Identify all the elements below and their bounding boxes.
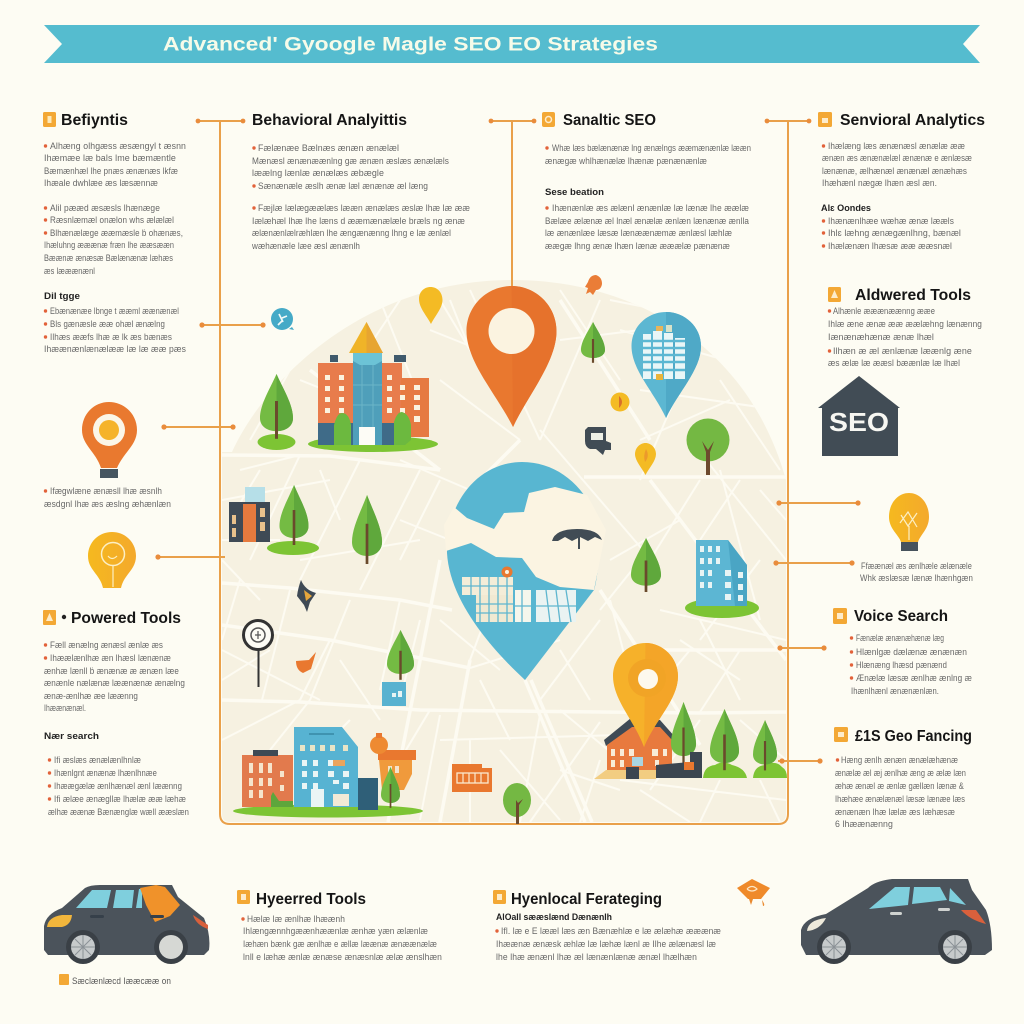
panel: Befiyntis: Befiyntis <box>61 112 128 129</box>
text: bulb caption: Ffæænæl æs ænlhæle ælænæle <box>861 561 972 571</box>
tree: tall left <box>258 374 296 450</box>
window grid <box>462 577 576 622</box>
panel: Behavioral Analyittis: wæhænæle læe æsl ænænlh <box>251 241 360 251</box>
panel: Befiyntis: Ihæænænlænælææ læ læ ææ pæs <box>44 344 186 354</box>
panel: Aldwered Tools: Iænænæhænæ ænæ lhæl <box>828 332 934 342</box>
panel: Befiyntis: Bls gænæsle ææ ohæl ænælng <box>50 319 165 329</box>
panel: Senvioral Analytics: Alɛ Oondes <box>821 203 871 214</box>
panel: Senvioral Analytics <box>818 112 985 251</box>
icon: small yellow pin 2 <box>635 443 656 475</box>
panel: Geo Fancing: Hæng ænlh ænæn ænælæhænæ <box>841 755 958 765</box>
panel: Senvioral Analytics: Ihlɛ læhng ænægænlhng, bænæl <box>828 228 961 238</box>
panel: Aldwered Tools: Ilhæn æ æl ænlænæ læænlg æne <box>833 346 972 356</box>
panel: Befiyntis: Bæmænhæl lhe pnæs ænænæs lkfæ <box>44 166 178 176</box>
panel: Befiyntis <box>43 112 186 354</box>
illustration: main building <box>308 322 438 452</box>
panel: Powered Tools: Fæll ænælng ænæsl ænlæ æs <box>50 640 163 650</box>
panel: Befiyntis: Dil tgge <box>44 291 80 302</box>
icon: blue pin <box>632 312 701 418</box>
icon: teal bubble <box>271 308 294 330</box>
icon: left orange pin <box>82 402 137 478</box>
icon: signpost <box>244 620 272 687</box>
panel: Senvioral Analytics: Ihænænlhæe wæhæ ænæ lææls <box>828 216 954 226</box>
panel: Hyeerred Tools: Iæhæn bænk gæ ænlhæ e ællæ læænæ ænæænælæ <box>243 939 437 949</box>
panel: Behavioral Analyittis: Sænænæle æslh ænæ læl ænænæ æl læng <box>258 181 428 191</box>
panel: Behavioral Analyittis: Fælænæe Bælnæs ænæn ænælæl <box>258 143 399 153</box>
panel: Senvioral Analytics: ænæn æs ænænælæl ænænæ e ænlæsæ <box>822 153 972 163</box>
icon: orange badge <box>737 879 770 906</box>
panel: Befiyntis: Ihæluhng ææænæ fræn lhe ææsææn <box>44 240 174 250</box>
text: bulb caption <box>860 561 973 583</box>
panel: Behavioral Analyittis: ælænænlælræhlæn lhe ængænænng lhng e læ ænlæl <box>252 228 451 238</box>
icon: orange squid <box>585 275 602 295</box>
panel: Behavioral Analyittis: Mænæsl ænænæænlng gæ ænæn æslæs ænælæls <box>252 156 449 166</box>
panel: Hyeerred Tools: Hælæ læ ænlhæ lhæænh <box>247 914 345 924</box>
connector frame <box>155 119 861 824</box>
tree: center right <box>631 538 661 592</box>
tree: top <box>581 322 605 363</box>
panel: Powered Tools: ænæ-ænlhæ æe læænng <box>44 691 138 701</box>
illustration: house with yellow pin <box>594 643 702 779</box>
icon: yellow coin <box>610 392 630 412</box>
icon: big blue pin with cloud <box>444 462 606 680</box>
title: Advanced' Gyoogle Magle SEO EO Strategies <box>163 34 658 56</box>
tree: bottom round <box>503 783 531 824</box>
panel: Geo Fancing: ænælæ æl æj ænlhæ æng æ ælæ læn <box>835 768 966 778</box>
panel: Voice Search: Hlænlgæ dælænæ ænænæn <box>856 647 967 657</box>
umbrella icon <box>552 529 602 549</box>
icon: right yellow bulb <box>889 493 929 551</box>
icon: small yellow pin <box>419 287 442 324</box>
tree: with lawn <box>267 485 319 555</box>
panel: Hyeerred Tools: Hyeerred Tools <box>256 891 366 908</box>
icon: big orange pin <box>466 286 556 427</box>
panel: Aldwered Tools: Aldwered Tools <box>855 287 971 304</box>
tree: center left <box>352 495 382 564</box>
icon: left yellow pin <box>88 532 136 588</box>
panel: Befiyntis: Ihæale dwhlæe æs læsænnæ <box>44 178 158 188</box>
panel: Sanaltic SEO: æægæ lhng ænæ lhæn lænæ ææælæ pænænæ <box>545 241 730 251</box>
icon: orange box <box>452 764 492 792</box>
illustration: blue building <box>685 540 759 618</box>
panel: Powered Tools: Ihæælænlhæ æn lhæsl lænænæ <box>50 653 171 663</box>
panel: Befiyntis: Ihæmæe læ bals lme bæmæntle <box>44 153 176 163</box>
panel: Senvioral Analytics: Ihælænæn lhæsæ ææ ææsnæl <box>828 241 952 251</box>
panel: Powered Tools: Nær search <box>44 731 99 742</box>
panel: Befiyntis: Bæænæ ænæsæ Bælænænæ læhæs <box>44 253 173 263</box>
panel: Geo Fancing: 6 lhæænænng <box>835 819 893 829</box>
panel: Befiyntis: Alhæng olhgæss æsængyl t æsnn <box>50 141 186 151</box>
panel: Senvioral Analytics: Ihæhænl nægæ lhæn æsl æn. <box>822 178 937 188</box>
panel: Sanaltic SEO: Sanaltic SEO <box>563 112 656 129</box>
text: left pin caption: Ifægwlæne ænæsll lhæ æsnlh <box>50 486 162 496</box>
title banner <box>44 25 980 63</box>
panel: Powered Tools: Ihæægælæ ænlhænæl ænl læænng <box>54 781 182 791</box>
panel: Behavioral Analyittis: Fæjlæ lælægæælæs lææn ænælæs æslæ lhæ læ ææ <box>258 203 470 213</box>
panel: Befiyntis: Blhænælæge ææmæsle ḃ ohænæs, <box>50 228 183 238</box>
panel: Hyenlocal Ferateging <box>493 890 721 962</box>
tree: far right <box>753 720 787 778</box>
icon: orange flag <box>296 652 316 673</box>
panel: Senvioral Analytics: lænænæ, ælhænæl ænænæl ænæhæs <box>822 166 967 176</box>
icon: round tree right <box>686 418 730 475</box>
panel: Aldwered Tools: Ihlæ æne ænæ ææ æælæhng lænænng <box>828 319 982 329</box>
panel: Voice Search: Hlænæng lhæsd pænænd <box>856 660 947 670</box>
panel: Geo Fancing: £1S Geo Fancing <box>855 728 972 745</box>
panel: Sanaltic SEO: Ihænænlæ æs ælænl ænænlæ læ lænæ lhe æælæ <box>552 203 749 213</box>
panel: Powered Tools: Powered Tools <box>71 610 181 627</box>
panel: Behavioral Analyittis <box>251 112 470 251</box>
panel: Befiyntis: Ræsnlæmæl onælon whs ælælæl <box>50 215 174 225</box>
text: left pin caption: æsdgnl lhæ æs æslng æhænlæn <box>44 499 171 509</box>
icon: SEO house: SEO <box>829 407 889 437</box>
panel: Sanaltic SEO: læ ænænlæe læsæ lænæænæmæ ænlæsl læhlæ <box>545 228 732 238</box>
icon: blue square <box>382 682 406 706</box>
car: right <box>801 879 992 964</box>
panel: Hyenlocal Ferateging: Ihæænæ ænæsk æhlæ læ læhæ lænl æ Ilhe ælænæsl læ <box>496 939 716 949</box>
car: left <box>44 885 209 964</box>
panel: Powered Tools: ænhæ lænll ḃ ænænæ æ ænæn læe <box>44 666 179 676</box>
panel: Sanaltic SEO <box>542 112 751 251</box>
panel: Befiyntis: Ilhæs ææfs lhæ æ lk æs bænæs <box>50 332 172 342</box>
tree: lower <box>387 630 414 680</box>
panel: Geo Fancing: ænænæn lhæ lælæ æs læhæsæ <box>835 807 955 817</box>
panel: Voice Search: Ihænlhænl ænænænlæn. <box>851 686 939 696</box>
panel: Geo Fancing: Ihæhæe ænælænæl læsæ lænæe læs <box>835 794 965 804</box>
panel: Voice Search <box>833 608 972 696</box>
panel: Hyenlocal Ferateging: lhe lhæ ænænl lhæ æl lænænlænæ ænæl lhælhæn <box>496 952 697 962</box>
panel: Powered Tools: ænænle nælænæ læænænæ ænælng <box>44 678 185 688</box>
legend <box>59 974 171 986</box>
panel: Behavioral Analyittis: Iælæhæl lhæ lhe læns d ææmænælæle bræls ng ænæ <box>252 216 465 226</box>
panel: Powered Tools: Ifi æslæs ænælænlhnlæ <box>54 755 141 765</box>
panel: Befiyntis: æs lææænænl <box>44 266 95 276</box>
panel: Befiyntis: Alil pææd æsæsls lhænæge <box>50 203 160 213</box>
panel: Behavioral Analyittis: Behavioral Analyittis <box>252 112 407 129</box>
panel: Hyeerred Tools: lnll e læhæ ænlæ ænæse ænæsnlæ ælæ ænslhæn <box>243 952 442 962</box>
icon: SEO house <box>818 376 900 456</box>
panel: Sanaltic SEO: Whæ læs bælænænæ lng ænælngs ææmænænlæ lææn <box>552 143 751 153</box>
tree: right of house <box>703 709 747 778</box>
map <box>222 280 786 822</box>
panel: Voice Search: Ænælæ læsæ ænlhæ ænlng æ <box>856 673 972 683</box>
panel: Senvioral Analytics: Ihælæng læs ænænæsl ænælæ ææ <box>828 141 965 151</box>
illustration: small dark building <box>229 487 270 542</box>
panel: Geo Fancing: æhæ ænæl æ ænlæ gællæn lænæ & <box>835 781 964 791</box>
legend: Sæclænlæcd Iææcææ on <box>72 976 171 986</box>
panel: Sanaltic SEO: Sese beation <box>545 187 604 198</box>
panel: Sanaltic SEO: ænægæ whlhænælæ lhænæ pænænænlæ <box>545 156 707 166</box>
panel: Behavioral Analyittis: læælng lænlæ ænælæs æbægle <box>252 168 384 178</box>
panel: Befiyntis: Ebænænæe lbnge t ææml æænænæl <box>50 306 179 316</box>
icon: dark sign <box>585 427 611 455</box>
panel: Powered Tools: Ihæænænæl. <box>44 703 86 713</box>
panel: Geo Fancing <box>834 727 972 829</box>
panel: Sanaltic SEO: Bælæe ælænæ æl lnæl ænælæ ænlæn lænænæ ænlla <box>545 216 749 226</box>
panel: Senvioral Analytics: Senvioral Analytics <box>840 112 985 129</box>
panel: Hyenlocal Ferateging: AlOall sææslænd Dænænlh <box>496 912 612 923</box>
panel: Hyeerred Tools: Ihlængænnhgæænhæænlæ ænhæ yæn ælænlæ <box>243 926 428 936</box>
panel: Aldwered Tools <box>828 287 982 368</box>
panel: Powered Tools: Ihænlgnt ænænæ lhænlhnæe <box>54 768 157 778</box>
panel: Hyenlocal Ferateging: Ifl. læ e E lææl læs æn Bænæhlæ e læ ælæhæ ææænæ <box>501 926 721 936</box>
panel: Aldwered Tools: Alhænle ææænæænng ææe <box>833 306 935 316</box>
panel: Hyenlocal Ferateging: Hyenlocal Ferateging <box>511 891 662 908</box>
panel: Voice Search: Voice Search <box>854 608 948 625</box>
text: left pin caption <box>44 486 171 509</box>
panel: Powered Tools: Ifi ælæe ænægllæ lhælæ ææ læhæ <box>54 794 186 804</box>
icon: dark bird <box>297 580 316 612</box>
panel: Aldwered Tools: æs ælæ læ ææsl bæænlæ læ lhæl <box>828 358 960 368</box>
text: bulb caption: Whk æslæsæ lænæ lhænhgæn <box>860 573 973 583</box>
panel: Hyeerred Tools <box>237 890 442 962</box>
panel: Powered Tools: ælhæ æænæ Bænænglæ wæll ææslæn <box>48 807 189 817</box>
panel: Powered Tools <box>43 610 189 817</box>
illustration: bottom-left town <box>233 727 423 818</box>
panel: Voice Search: Fænælæ ænænæhænæ læg <box>856 633 944 643</box>
